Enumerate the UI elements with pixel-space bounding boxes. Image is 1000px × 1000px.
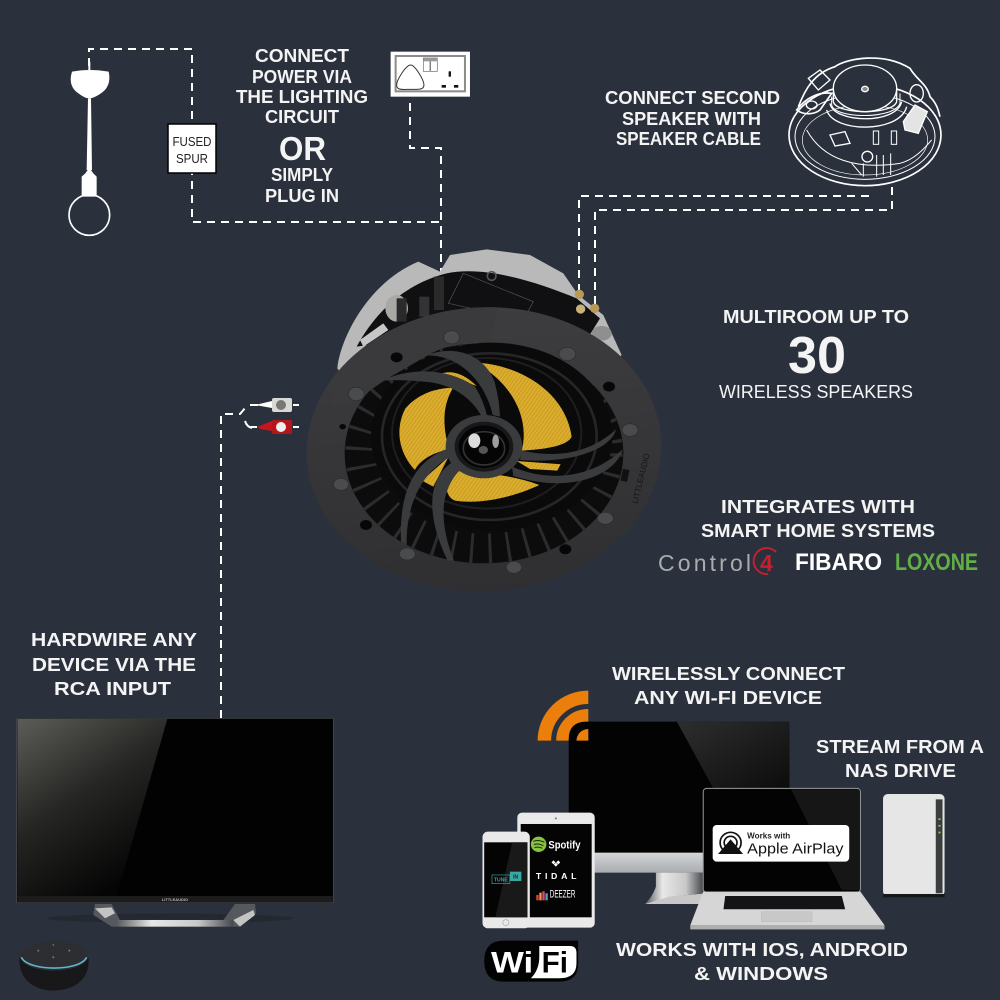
fused spur box <box>168 124 216 173</box>
heading: connect power: SIMPLY <box>271 164 334 185</box>
badge: Apple AirPlay: Works with <box>747 831 790 840</box>
connectors on board <box>360 272 612 347</box>
logo: Deezer: DEEZER <box>550 888 576 900</box>
heading: connect power: CIRCUIT <box>265 106 340 127</box>
heading: multiroom <box>719 306 913 402</box>
heading: connect second speaker: CONNECT SECOND <box>605 87 780 108</box>
NAS drive <box>883 794 945 897</box>
heading: hardwire: DEVICE VIA THE <box>32 654 196 675</box>
desktop monitor <box>569 722 789 904</box>
heading: smart home: SMART HOME SYSTEMS <box>701 520 935 541</box>
heading: hardwire <box>31 629 198 699</box>
heading: connect power <box>236 45 368 206</box>
wiring: speaker cable dashed lines <box>579 186 892 304</box>
fused spur box: FUSED <box>172 134 212 149</box>
tv reflection <box>17 719 167 896</box>
front plate <box>299 298 668 600</box>
heading: connect second speaker <box>605 87 780 149</box>
brand mark and switch: LITTLEAUDIO <box>631 452 652 504</box>
devices group <box>483 697 945 982</box>
plate screws <box>339 352 615 554</box>
logo: TuneIn: IN <box>513 874 519 880</box>
logo: Control4: Control <box>658 550 751 576</box>
icon: wifi centre <box>576 729 588 741</box>
spokes <box>383 351 623 561</box>
logo: FIBARO: FIBARO <box>795 549 882 576</box>
heading: smart home <box>701 496 935 541</box>
television <box>17 718 333 927</box>
badge: Apple AirPlay: Apple AirPlay <box>747 841 844 858</box>
heading: connect power: POWER VIA <box>252 66 352 87</box>
yellow cone segments <box>399 363 572 502</box>
heading: wireless connect <box>612 663 846 708</box>
heading: multiroom: MULTIROOM UP TO <box>723 306 909 327</box>
icon: wifi arcs <box>544 697 588 741</box>
heading: multiroom: 30 <box>788 327 846 385</box>
heading: NAS: NAS DRIVE <box>845 760 956 781</box>
heading: connect second speaker: SPEAKER WITH <box>622 108 761 129</box>
icon: wall socket <box>391 52 470 97</box>
heading: works with: & WINDOWS <box>694 963 828 984</box>
tv brand: LITTLEAUDIO <box>162 897 188 902</box>
heading: smart home: INTEGRATES WITH <box>721 496 915 517</box>
cooling fins <box>345 343 623 563</box>
brand mark and switch <box>620 452 652 504</box>
logo: LOXONE: LOXONE <box>895 549 978 576</box>
badge: Apple AirPlay <box>713 825 849 862</box>
icon: RCA connectors <box>250 398 299 434</box>
heading: hardwire: RCA INPUT <box>54 678 172 699</box>
logo: Tidal: TIDAL <box>536 871 577 881</box>
logo: Wi-Fi: Fi <box>542 947 568 980</box>
heading: hardwire: HARDWIRE ANY <box>31 629 198 650</box>
heading: connect power: OR <box>279 130 326 167</box>
smart home logos <box>658 548 978 576</box>
tablet <box>517 813 595 928</box>
plate discs <box>333 331 638 573</box>
fused spur box: SPUR <box>176 151 208 166</box>
logo: Wi-Fi: Wi <box>491 947 533 980</box>
logo: TuneIn: TUNE <box>494 877 508 883</box>
logo: Control4: 4 <box>760 550 773 576</box>
heading: connect power: PLUG IN <box>265 185 339 206</box>
surround <box>371 343 612 531</box>
tweeter <box>446 415 522 478</box>
logo: Spotify: Spotify <box>548 839 581 851</box>
logo: TuneIn <box>492 872 521 884</box>
circuit board <box>357 271 600 347</box>
heading: works with <box>616 939 908 984</box>
logo: Wi-Fi <box>484 941 578 982</box>
tv bezel strip <box>17 896 333 902</box>
heading: wireless connect: WIRELESSLY CONNECT <box>612 663 846 684</box>
icon: second speaker line art <box>789 58 941 186</box>
heading: multiroom: WIRELESS SPEAKERS <box>719 381 913 402</box>
heading: connect power: CONNECT <box>255 45 350 66</box>
heading: connect second speaker: SPEAKER CABLE <box>616 128 761 149</box>
wiring: power dashed lines <box>89 49 441 272</box>
tv screen <box>17 718 333 903</box>
icon: smart speaker dot <box>19 941 89 991</box>
wiring: RCA dashed line <box>221 407 252 718</box>
speaker housing <box>337 249 622 407</box>
heading: NAS: STREAM FROM A <box>816 736 984 757</box>
plate area above fins <box>339 307 496 391</box>
heading: wireless connect: ANY WI-FI DEVICE <box>634 687 822 708</box>
tv stand <box>47 904 293 927</box>
main speaker <box>299 249 668 600</box>
phone <box>483 832 530 928</box>
heading: works with: WORKS WITH IOS, ANDROID <box>616 939 908 960</box>
laptop <box>690 788 884 929</box>
icon: pendant ceiling light <box>69 62 110 235</box>
heading: NAS <box>816 736 984 781</box>
heading: connect power: THE LIGHTING <box>236 86 368 107</box>
